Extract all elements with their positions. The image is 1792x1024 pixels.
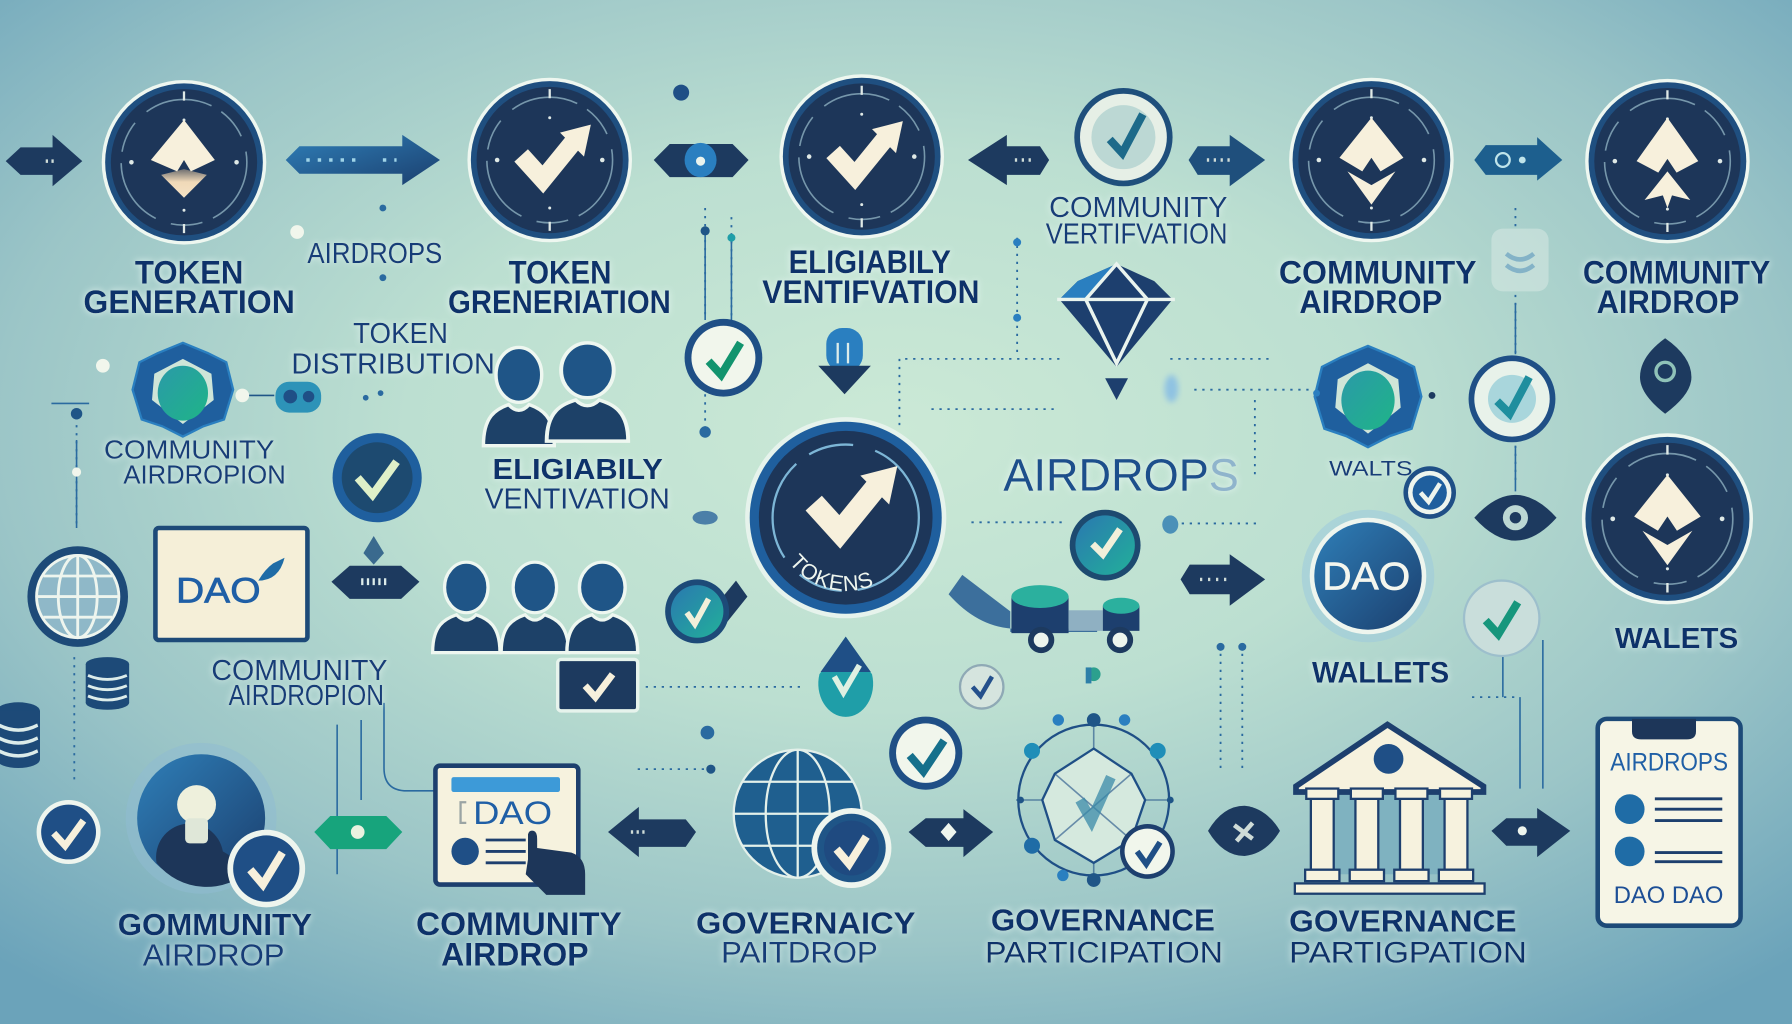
heading: token grenerIation: TOKEN [509,254,611,290]
icon: card check [558,659,638,711]
label: eligibily ventivation [485,454,670,516]
badge: check arrow 2 [779,74,944,239]
label: walets: WALETS [1615,623,1738,655]
label: wallets: WALLETS [1312,656,1449,689]
heading: token generation [83,254,295,320]
heading: community airdrop right [1583,254,1770,320]
arrow: left middle bottom [608,807,696,857]
label: token distribution: DISTRIBUTION [291,349,495,381]
arrow: green hex [314,816,402,849]
icon: small check badge [37,800,101,864]
icon: shield left [133,343,274,437]
icon: light check circle [1464,581,1539,656]
heading: token generation: TOKEN [135,254,243,290]
heading: governaicy paitdrop [696,906,916,969]
icon: green check circle [685,319,762,397]
arrow: middle right [1181,554,1265,606]
icon: small diamond [363,536,384,565]
label: token distribution [291,318,495,381]
heading: community airdrop: AIRDROP [1299,284,1442,320]
icon: coin stack [86,657,129,710]
arrow: hex middle left [331,566,419,599]
icon: temple [1295,725,1485,894]
arrow: top row 2 [286,135,440,185]
label: eligibily ventivation: VENTIVATION [485,484,670,516]
icon: DAO circle: DAO [1322,556,1410,599]
icon: network check [1120,824,1175,879]
icon: coin stack left [0,702,40,768]
heading: governaicy paitdrop: PAITDROP [721,936,878,969]
icon: teal check circle [1469,355,1555,442]
heading: community airdrop bottom [416,906,622,973]
label: community airdropion lower: COMMUNITY [211,655,387,687]
icon: teal check blob [1070,510,1141,581]
heading: community airdrop right: COMMUNITY [1583,254,1770,290]
heading: token grenerIation: GRENERIATION [448,284,671,320]
icon: globe check [811,808,891,888]
heading: token generation: GENERATION [83,284,295,320]
icon: teal pill [275,382,321,413]
arrow: hex connector [654,143,749,177]
icon: down arrow [818,328,871,394]
label: community vertifvation: VERTIFVATION [1046,218,1227,250]
panel: DAO box: DAO [176,570,261,610]
central badge: tokens [745,417,946,618]
badge: light check [1074,88,1173,186]
heading: eligibily ventifvation: VENTIFVATION [762,274,979,310]
label: community airdropion lower [211,655,387,712]
central badge: tokens: TOKENS [792,552,872,592]
label: airdrops: AIRDROPS [307,238,442,270]
heading: community airdrop right: AIRDROP [1597,284,1739,320]
label: token distribution: TOKEN [353,318,448,350]
label: community airdropion [104,434,286,489]
connector lines and dotted paths [51,205,1543,874]
panel: DAO document [435,766,585,895]
icon: DAO circle [1302,510,1434,642]
arrow: right pointing [1189,135,1265,186]
icon: green marker [1086,667,1101,683]
icon: token wagon [949,575,1139,650]
icon: drop check [818,637,873,717]
heading: governance participation [985,902,1223,969]
icon: three people [433,562,638,653]
icon: small check [1403,466,1456,519]
arrow: top row 1 [6,135,82,186]
heading: gommunity airdrop [118,907,312,973]
small dot [673,85,689,101]
arrow: dark hex [1208,806,1280,856]
icon: check badge [333,433,422,522]
icon: globe left [27,546,128,647]
heading: governaicy paitdrop: GOVERNAICY [696,906,916,941]
heading: governance partigpation [1289,903,1527,969]
panel: phone card: DAO DAO [1614,882,1723,909]
badge: check arrow 1 [467,78,632,242]
panel: phone card [1598,719,1741,926]
arrow: left pointing [968,135,1049,185]
heading: governance partigpation: PARTIGPATION [1289,936,1527,969]
heading: governance partigpation: GOVERNANCE [1289,903,1517,938]
icon: two people [483,343,628,446]
icon: shield right [1313,346,1435,447]
label: walts: WALTS [1329,455,1413,480]
arrow: to phone card [1491,808,1570,857]
icon: check badge on person [227,830,305,907]
icon: ghost card [1491,229,1549,291]
label: community airdropion: COMMUNITY [104,434,274,464]
heading: community airdrop bottom: AIRDROP [441,937,589,973]
badge: community airdrop 2 [1585,79,1750,243]
heading: gommunity airdrop: GOMMUNITY [118,907,312,942]
badge: token generation [102,80,266,245]
icon: governance network [1016,713,1174,887]
icon: check with tag [665,579,747,643]
heading: community airdrop bottom: COMMUNITY [416,906,622,942]
panel: phone card: AIRDROPS [1610,748,1728,776]
heading: eligibily ventifvation [762,244,979,310]
icon: person circle [126,743,277,894]
heading: community airdrop [1279,254,1477,320]
icon: diamond gem [1057,264,1175,400]
heading: token grenerIation [448,254,671,320]
icon: check circle lower [889,717,962,790]
icon: small light check [960,665,1003,709]
badge: community airdrop [1289,78,1454,242]
heading: community airdrop: COMMUNITY [1279,254,1477,290]
badge: wallets right [1582,433,1753,604]
label: community airdropion lower: AIRDROPION [229,680,384,712]
heading: governance participation: GOVERNANCE [991,902,1215,937]
label: community vertifvation: COMMUNITY [1049,192,1227,224]
panel: DAO box [155,528,307,640]
label: community airdropion: AIRDROPION [123,459,286,489]
label: airdrops large: AIRDROPS [1003,449,1239,500]
heading: governance participation: PARTICIPATION [985,936,1223,969]
label: community vertifvation [1046,192,1227,250]
icon: eye hex [1474,495,1557,541]
heading: eligibily ventifvation: ELIGIABILY [789,244,951,280]
panel: DAO document: DAO [473,795,552,831]
heading: gommunity airdrop: AIRDROP [143,938,285,973]
icon: globe [734,750,862,878]
label: eligibily ventivation: ELIGIABILY [493,454,663,486]
arrow: teal [1474,137,1562,181]
icon: pin [1640,338,1691,414]
arrow: right hex [909,809,993,857]
